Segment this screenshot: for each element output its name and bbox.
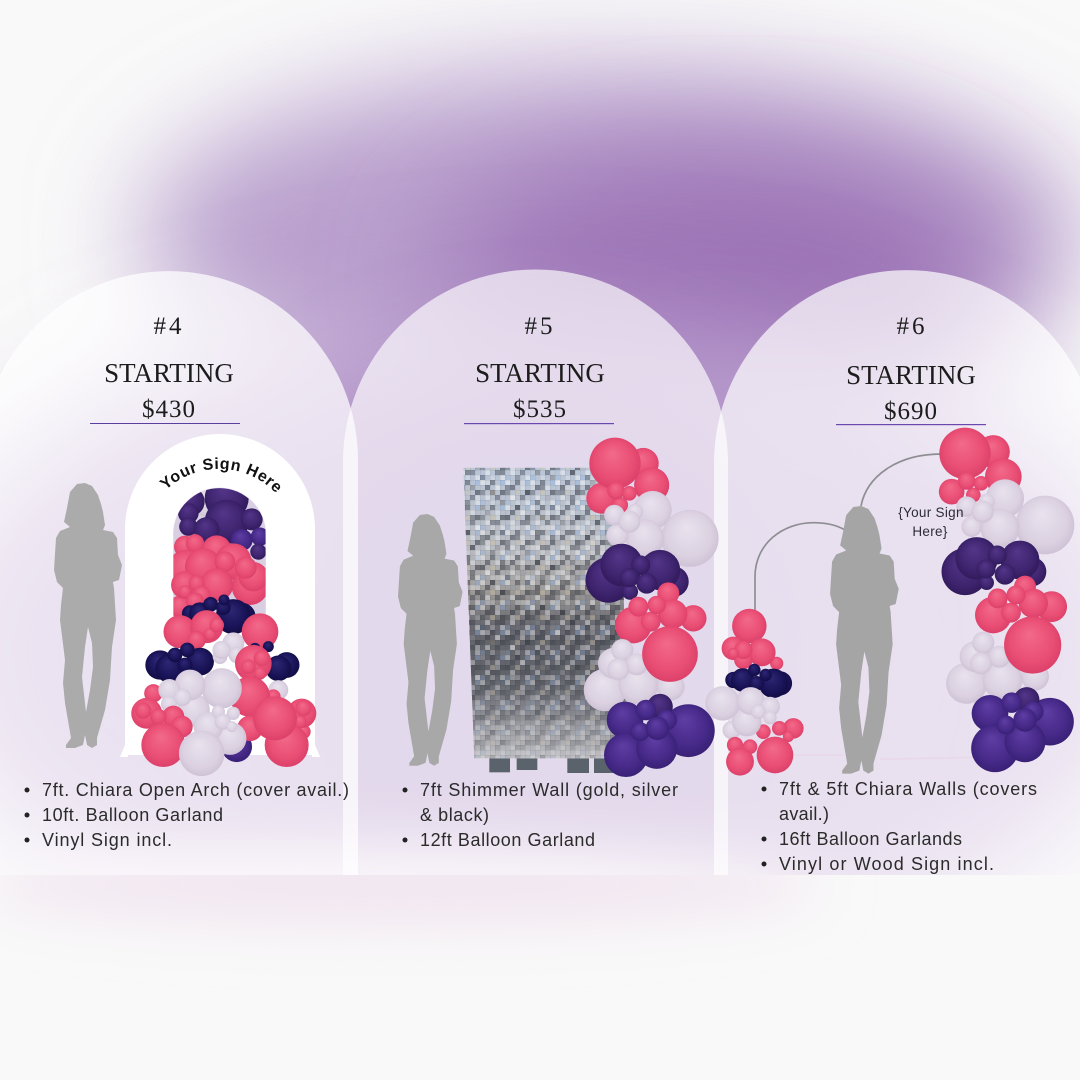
- feature list: 7ft & 5ft Chiara Walls (covers: [779, 779, 1037, 799]
- panel: package 4: [24, 313, 349, 850]
- panel background: arch 6: [714, 270, 1080, 875]
- feature list: avail.): [779, 804, 829, 824]
- sign placeholder text: {Your Sign: [898, 505, 964, 520]
- balloons inside arch opening: [173, 488, 266, 616]
- feature list: Vinyl or Wood Sign incl.: [779, 854, 994, 874]
- chiara wall frames and base lines: [755, 454, 975, 759]
- underline: [836, 424, 986, 425]
- panel: package 6: [705, 313, 1074, 874]
- curved sign text: Your Sign Here: [158, 457, 280, 492]
- heading: number 4: #4: [154, 313, 184, 340]
- price 535: $535: [513, 396, 567, 423]
- silhouette person: [830, 506, 899, 774]
- pink glow at bottom: [0, 845, 820, 925]
- panel background: arch 5: [343, 269, 728, 875]
- balloon garland small: [705, 609, 804, 776]
- heading: number 5: #5: [524, 313, 556, 340]
- feature list: 12ft Balloon Garland: [420, 830, 595, 850]
- feature list: 7ft Shimmer Wall (gold, silver: [420, 780, 678, 800]
- heading: starting: STARTING: [475, 358, 605, 388]
- heading: starting: STARTING: [104, 358, 234, 388]
- balloon garland 10ft: [131, 568, 316, 776]
- silhouette person: [398, 514, 463, 766]
- feature list: 16ft Balloon Garlands: [779, 829, 962, 849]
- sign placeholder text: [898, 505, 964, 539]
- underline: [90, 423, 240, 424]
- heading: number 6: #6: [896, 313, 928, 340]
- feature list: Vinyl Sign incl.: [42, 830, 172, 850]
- balloon garland large: [939, 428, 1074, 772]
- feature list: [762, 779, 1037, 874]
- price 430: $430: [142, 396, 196, 423]
- panel background: arch 4: [0, 271, 358, 875]
- feature list: [402, 780, 678, 850]
- feature list: 10ft. Balloon Garland: [42, 805, 223, 825]
- balloon garland 12ft: [584, 438, 719, 777]
- shimmer wall: [463, 468, 628, 773]
- feature list: & black): [420, 805, 489, 825]
- price 690: $690: [884, 398, 938, 425]
- sign placeholder text: Here}: [912, 524, 948, 539]
- open arch backdrop with sign: [120, 434, 320, 757]
- underline: [464, 423, 614, 424]
- feature list: [24, 780, 349, 850]
- silhouette person: [54, 483, 122, 748]
- feature list: 7ft. Chiara Open Arch (cover avail.): [42, 780, 349, 800]
- panel: package 5: [398, 313, 719, 850]
- heading: starting: STARTING: [846, 360, 976, 390]
